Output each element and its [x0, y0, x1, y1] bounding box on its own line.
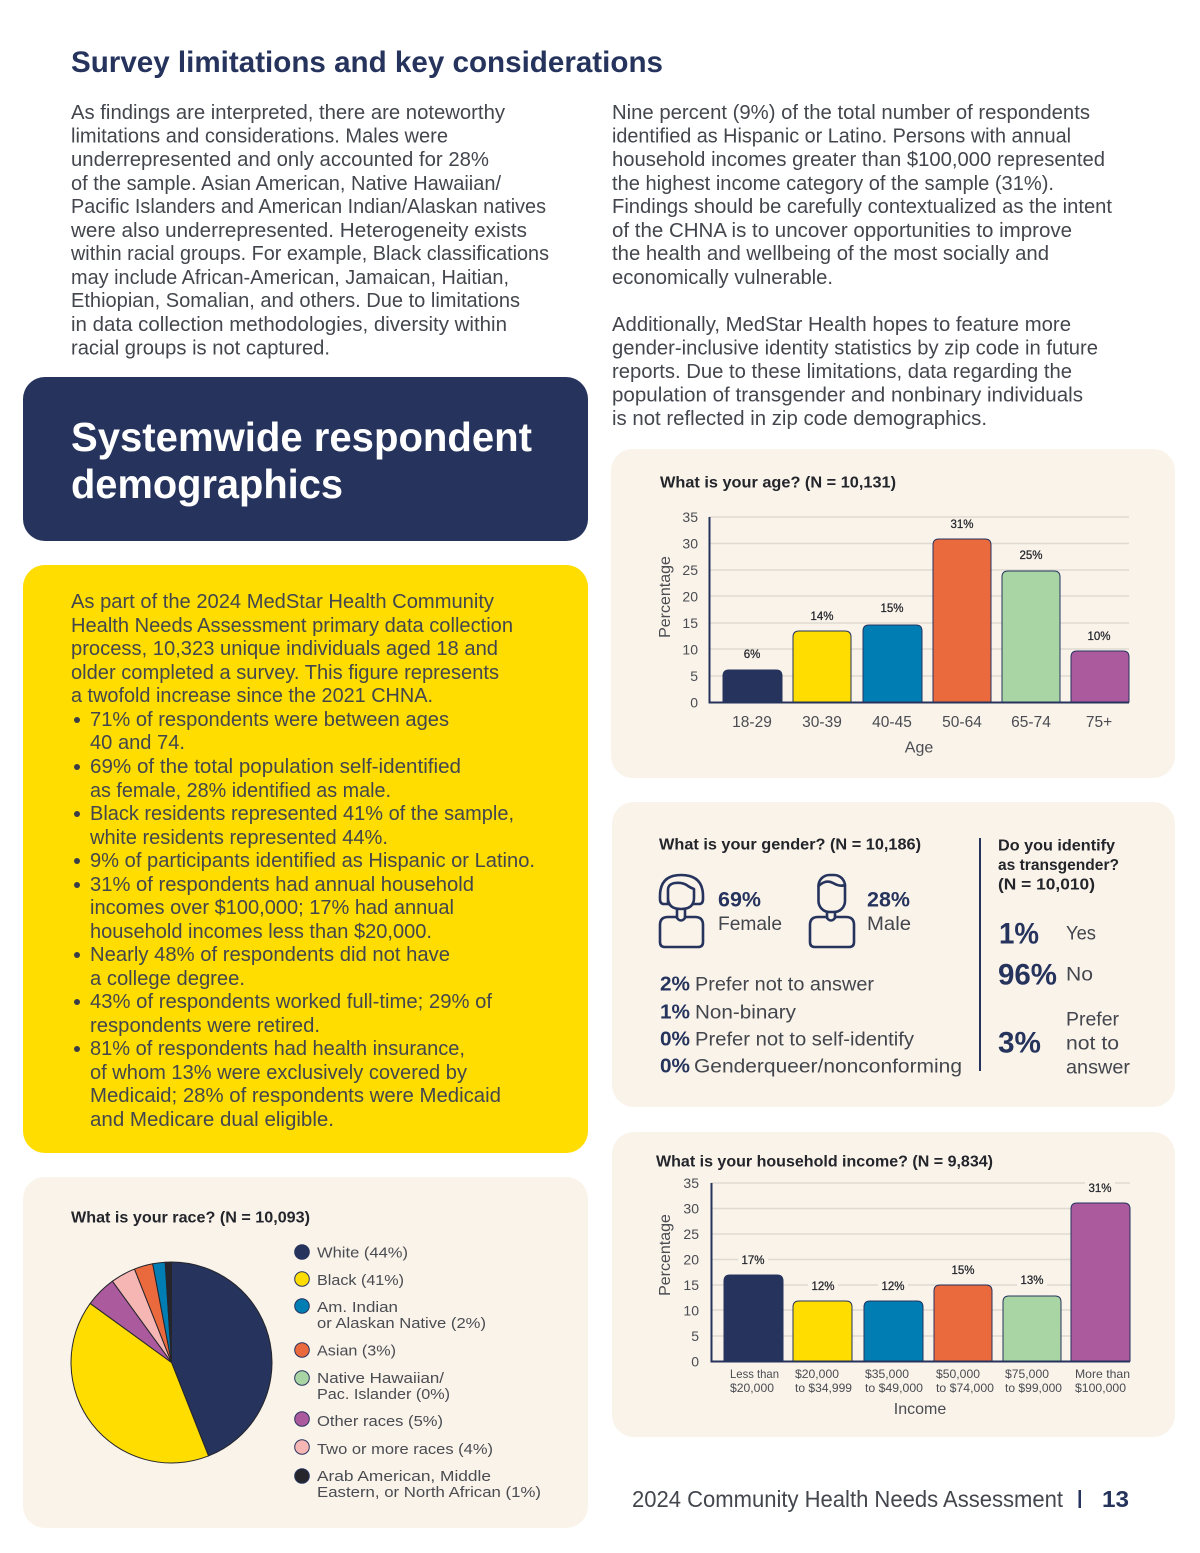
list: other gender responses: 0% — [660, 1028, 690, 1050]
panel: systemwide respondent demographics banner: Systemwide respondent — [71, 414, 532, 460]
list: other gender responses: Prefer not to self-identify — [695, 1028, 914, 1050]
bar chart: income: Less than — [730, 1367, 779, 1381]
text block: limitations left column: limitations and considerations. Males were — [71, 126, 448, 148]
legend: race categories — [295, 1244, 541, 1501]
bar chart: age: 15% — [880, 603, 904, 615]
bar chart: income: $75,000 — [1005, 1367, 1049, 1381]
stats: transgender responses — [998, 918, 1131, 1078]
bar chart: age: 40-45 — [872, 714, 912, 731]
bar chart: income: 15% — [951, 1265, 975, 1277]
bar chart: age: Age — [905, 740, 933, 756]
icon: male figure — [810, 875, 854, 947]
panel: survey overview summary: of whom 13% were exclusively covered by — [90, 1062, 467, 1084]
panel: survey overview summary: As part of the 2024 MedStar Health Community — [71, 591, 494, 613]
bar chart: age: 35 — [682, 509, 698, 525]
text block: limitations right column: Additionally, MedStar Health hopes to feature more — [612, 314, 1071, 336]
panel: survey overview summary: household incomes less than $20,000. — [90, 921, 432, 943]
bar chart: income: 35 — [683, 1175, 699, 1191]
text block: limitations right column: Nine percent (9%) of the total number of respondents — [612, 102, 1090, 124]
text block: limitations left column: were also underrepresented. Heterogeneity exists — [70, 220, 527, 242]
bar chart: income: 20 — [683, 1252, 699, 1268]
text block: limitations left column: in data collection methodologies, diversity within — [71, 314, 507, 336]
legend: race categories: Black (41%) — [317, 1272, 404, 1289]
text: male share: Male — [867, 913, 911, 935]
text block: limitations right column: population of transgender and nonbinary individuals — [612, 384, 1083, 406]
legend: race categories: or Alaskan Native (2%) — [317, 1315, 486, 1332]
bar chart: age: Percentage — [657, 556, 674, 638]
text block: limitations left column: As findings are interpreted, there are noteworthy — [71, 102, 505, 124]
legend: race categories: Eastern, or North African (1%) — [317, 1484, 541, 1501]
panel: survey overview summary: process, 10,323 unique individuals aged 18 and — [71, 638, 498, 660]
legend: race categories: Pac. Islander (0%) — [317, 1386, 450, 1403]
text: female share: 69% — [718, 888, 761, 912]
bar chart: age: 25% — [1019, 550, 1043, 562]
list: other gender responses — [660, 974, 962, 1078]
panel: race — [23, 1177, 588, 1528]
text block: limitations right column: gender-inclusive identity statistics by zip code in future — [612, 338, 1098, 360]
bar chart: income: 17% — [741, 1255, 765, 1267]
heading: income question: What is your household income? (N = 9,834) — [656, 1154, 993, 1170]
text block: limitations left column: of the sample. Asian American, Native Hawaiian/ — [71, 173, 501, 195]
panel: age — [611, 449, 1175, 778]
text block: limitations right column: of the CHNA is to uncover opportunities to improve — [612, 220, 1072, 242]
legend: race categories: Two or more races (4%) — [317, 1441, 493, 1458]
text block: limitations right column: the highest income category of the sample (31%). — [612, 173, 1054, 195]
bar chart: income: $100,000 — [1075, 1381, 1126, 1395]
legend: race categories: White (44%) — [317, 1244, 408, 1262]
bar chart: income: 0 — [691, 1354, 699, 1370]
legend: race categories: Arab American, Middle — [317, 1468, 491, 1485]
panel: survey overview summary: as female, 28% identified as male. — [90, 780, 391, 802]
text block: limitations right column: the health and wellbeing of the most socially and — [612, 243, 1049, 265]
panel: survey overview summary: older completed a survey. This figure represents — [71, 662, 499, 684]
bar chart: income: 12% — [811, 1281, 835, 1293]
panel: survey overview summary: a college degree. — [90, 968, 245, 990]
text: female share — [718, 888, 782, 935]
bar chart: age: 25 — [682, 562, 698, 578]
panel: survey overview summary: Black residents represented 41% of the sample, — [90, 803, 514, 825]
stats: transgender responses: answer — [1066, 1056, 1131, 1078]
bar chart: income: 13% — [1020, 1275, 1044, 1287]
panel: survey overview summary: 81% of respondents had health insurance, — [90, 1038, 465, 1060]
text block: limitations left column: underrepresented and only accounted for 28% — [71, 149, 489, 171]
panel: survey overview summary — [23, 565, 588, 1153]
bar chart: income: $50,000 — [936, 1367, 980, 1381]
legend: race categories: Asian (3%) — [317, 1342, 396, 1360]
list: other gender responses: Genderqueer/nonconforming — [694, 1056, 962, 1078]
stats: transgender responses: Prefer — [1066, 1008, 1119, 1030]
text block: limitations left column — [70, 102, 549, 360]
panel: survey overview summary: 40 and 74. — [90, 732, 185, 754]
heading: transgender question: as transgender? — [998, 857, 1119, 874]
bar chart: income: $20,000 — [795, 1367, 839, 1381]
text: female share: Female — [718, 913, 782, 935]
list: other gender responses: Non-binary — [695, 1002, 796, 1024]
text block: limitations left column: racial groups is not captured. — [71, 338, 330, 360]
bar chart: age: 10% — [1087, 631, 1111, 643]
list: other gender responses: 1% — [660, 1002, 690, 1024]
bar chart: age: 31% — [950, 519, 974, 531]
text block: limitations left column: within racial groups. For example, Black classifications — [70, 243, 549, 265]
heading: transgender question: Do you identify — [998, 838, 1115, 854]
bar chart: age: 20 — [682, 588, 698, 604]
bar chart: age: 50-64 — [942, 714, 982, 731]
bar chart: age: 6% — [744, 649, 760, 661]
bar chart: income: More than — [1075, 1367, 1130, 1381]
bar chart: age: 15 — [682, 615, 698, 631]
pie chart: race — [71, 1262, 272, 1463]
bar chart: income: 12% — [881, 1281, 905, 1293]
bar chart: income — [657, 1175, 1130, 1418]
bar chart: income: 15 — [683, 1277, 699, 1293]
legend: race categories: Am. Indian — [317, 1299, 398, 1316]
text block: limitations right column: identified as Hispanic or Latino. Persons with annual — [612, 126, 1071, 148]
stats: transgender responses: 96% — [998, 958, 1057, 992]
bar chart: age: 30-39 — [802, 714, 842, 731]
legend: race categories: Other races (5%) — [317, 1413, 443, 1430]
bar chart: income: 30 — [683, 1200, 699, 1216]
list: other gender responses: 2% — [660, 974, 690, 996]
icon: female figure — [660, 875, 703, 947]
bar chart: age: 14% — [810, 611, 834, 623]
panel: systemwide respondent demographics banner — [23, 377, 588, 541]
bar chart: age: 75+ — [1086, 714, 1112, 731]
panel: survey overview summary: respondents were retired. — [90, 1015, 320, 1037]
bar chart: income: 25 — [683, 1226, 699, 1242]
bar chart: income: 31% — [1088, 1183, 1112, 1195]
text block: limitations left column: may include African-American, Jamaican, Haitian, — [71, 267, 509, 289]
footer: report name and page number: 13 — [1102, 1486, 1129, 1512]
panel: survey overview summary: 31% of respondents had annual household — [90, 874, 474, 896]
list: other gender responses: Prefer not to answer — [695, 974, 875, 996]
stats: transgender responses: No — [1066, 964, 1093, 986]
panel: survey overview summary: 43% of respondents worked full-time; 29% of — [90, 991, 492, 1013]
bar chart: age: 0 — [690, 694, 698, 710]
text block: limitations left column: Pacific Islanders and American Indian/Alaskan natives — [71, 196, 546, 218]
bar chart: age — [657, 509, 1129, 756]
stats: transgender responses: 3% — [998, 1026, 1041, 1060]
text block: limitations right column: is not reflected in zip code demographics. — [612, 408, 987, 430]
heading: transgender question: (N = 10,010) — [998, 876, 1095, 894]
bar chart: income: Percentage — [657, 1214, 674, 1296]
text: male share: 28% — [867, 888, 910, 912]
stats: transgender responses: Yes — [1066, 922, 1096, 944]
heading: gender question: What is your gender? (N = 10,186) — [659, 836, 921, 854]
stats: transgender responses: 1% — [999, 918, 1039, 950]
text block: limitations right column — [612, 102, 1112, 430]
bar chart: income: $35,000 — [865, 1367, 909, 1381]
panel: survey overview summary: a twofold increase since the 2021 CHNA. — [71, 685, 433, 707]
bar chart: income: to $99,000 — [1005, 1381, 1062, 1395]
text block: limitations right column: reports. Due to these limitations, data regarding the — [612, 361, 1072, 383]
panel: survey overview summary: 71% of respondents were between ages — [90, 709, 449, 731]
bar chart: income: to $34,999 — [795, 1381, 852, 1395]
bar chart: income: $20,000 — [730, 1381, 774, 1395]
panel: systemwide respondent demographics banner: demographics — [71, 461, 343, 507]
panel: survey overview summary: 69% of the total population self-identified — [90, 756, 461, 778]
text: male share — [867, 888, 911, 935]
heading: transgender question — [998, 838, 1119, 894]
panel: survey overview summary: Nearly 48% of respondents did not have — [90, 944, 450, 966]
panel: survey overview summary: and Medicare dual eligible. — [90, 1109, 334, 1131]
text block: limitations left column: Ethiopian, Somalian, and others. Due to limitations — [71, 290, 520, 312]
bar chart: income: Income — [894, 1401, 946, 1418]
heading: survey limitations: Survey limitations and key considerations — [71, 46, 663, 79]
bar chart: age: 30 — [682, 536, 698, 552]
bar chart: age: 5 — [690, 668, 698, 684]
panel: survey overview summary: incomes over $100,000; 17% had annual — [90, 897, 454, 919]
panel: gender — [612, 802, 1175, 1107]
bar chart: age: 10 — [682, 642, 698, 658]
panel: survey overview summary: white residents represented 44%. — [89, 827, 388, 849]
footer: report name and page number: 2024 Community Health Needs Assessment — [632, 1486, 1064, 1512]
panel: survey overview summary: 9% of participants identified as Hispanic or Latino. — [90, 850, 535, 872]
bar chart: income: 5 — [691, 1328, 699, 1344]
bar chart: age: 18-29 — [732, 714, 772, 731]
text block: limitations right column: household incomes greater than $100,000 represented — [612, 149, 1105, 171]
bar chart: income: to $74,000 — [936, 1381, 994, 1395]
panel: household income — [612, 1132, 1175, 1437]
text block: limitations right column: Findings should be carefully contextualized as the intent — [612, 196, 1112, 218]
text block: limitations right column: economically vulnerable. — [612, 267, 833, 289]
heading: race question: What is your race? (N = 10,093) — [71, 1210, 310, 1226]
stats: transgender responses: not to — [1066, 1032, 1119, 1054]
bar chart: age: 65-74 — [1011, 714, 1051, 731]
panel: survey overview summary: Medicaid; 28% of respondents were Medicaid — [90, 1085, 501, 1107]
bar chart: income: 10 — [683, 1302, 699, 1318]
panel: survey overview summary: Health Needs Assessment primary data collection — [71, 615, 513, 637]
legend: race categories: Native Hawaiian/ — [317, 1370, 445, 1387]
heading: age question: What is your age? (N = 10,131) — [660, 474, 896, 492]
bar chart: income: to $49,000 — [865, 1381, 923, 1395]
list: other gender responses: 0% — [660, 1056, 690, 1078]
